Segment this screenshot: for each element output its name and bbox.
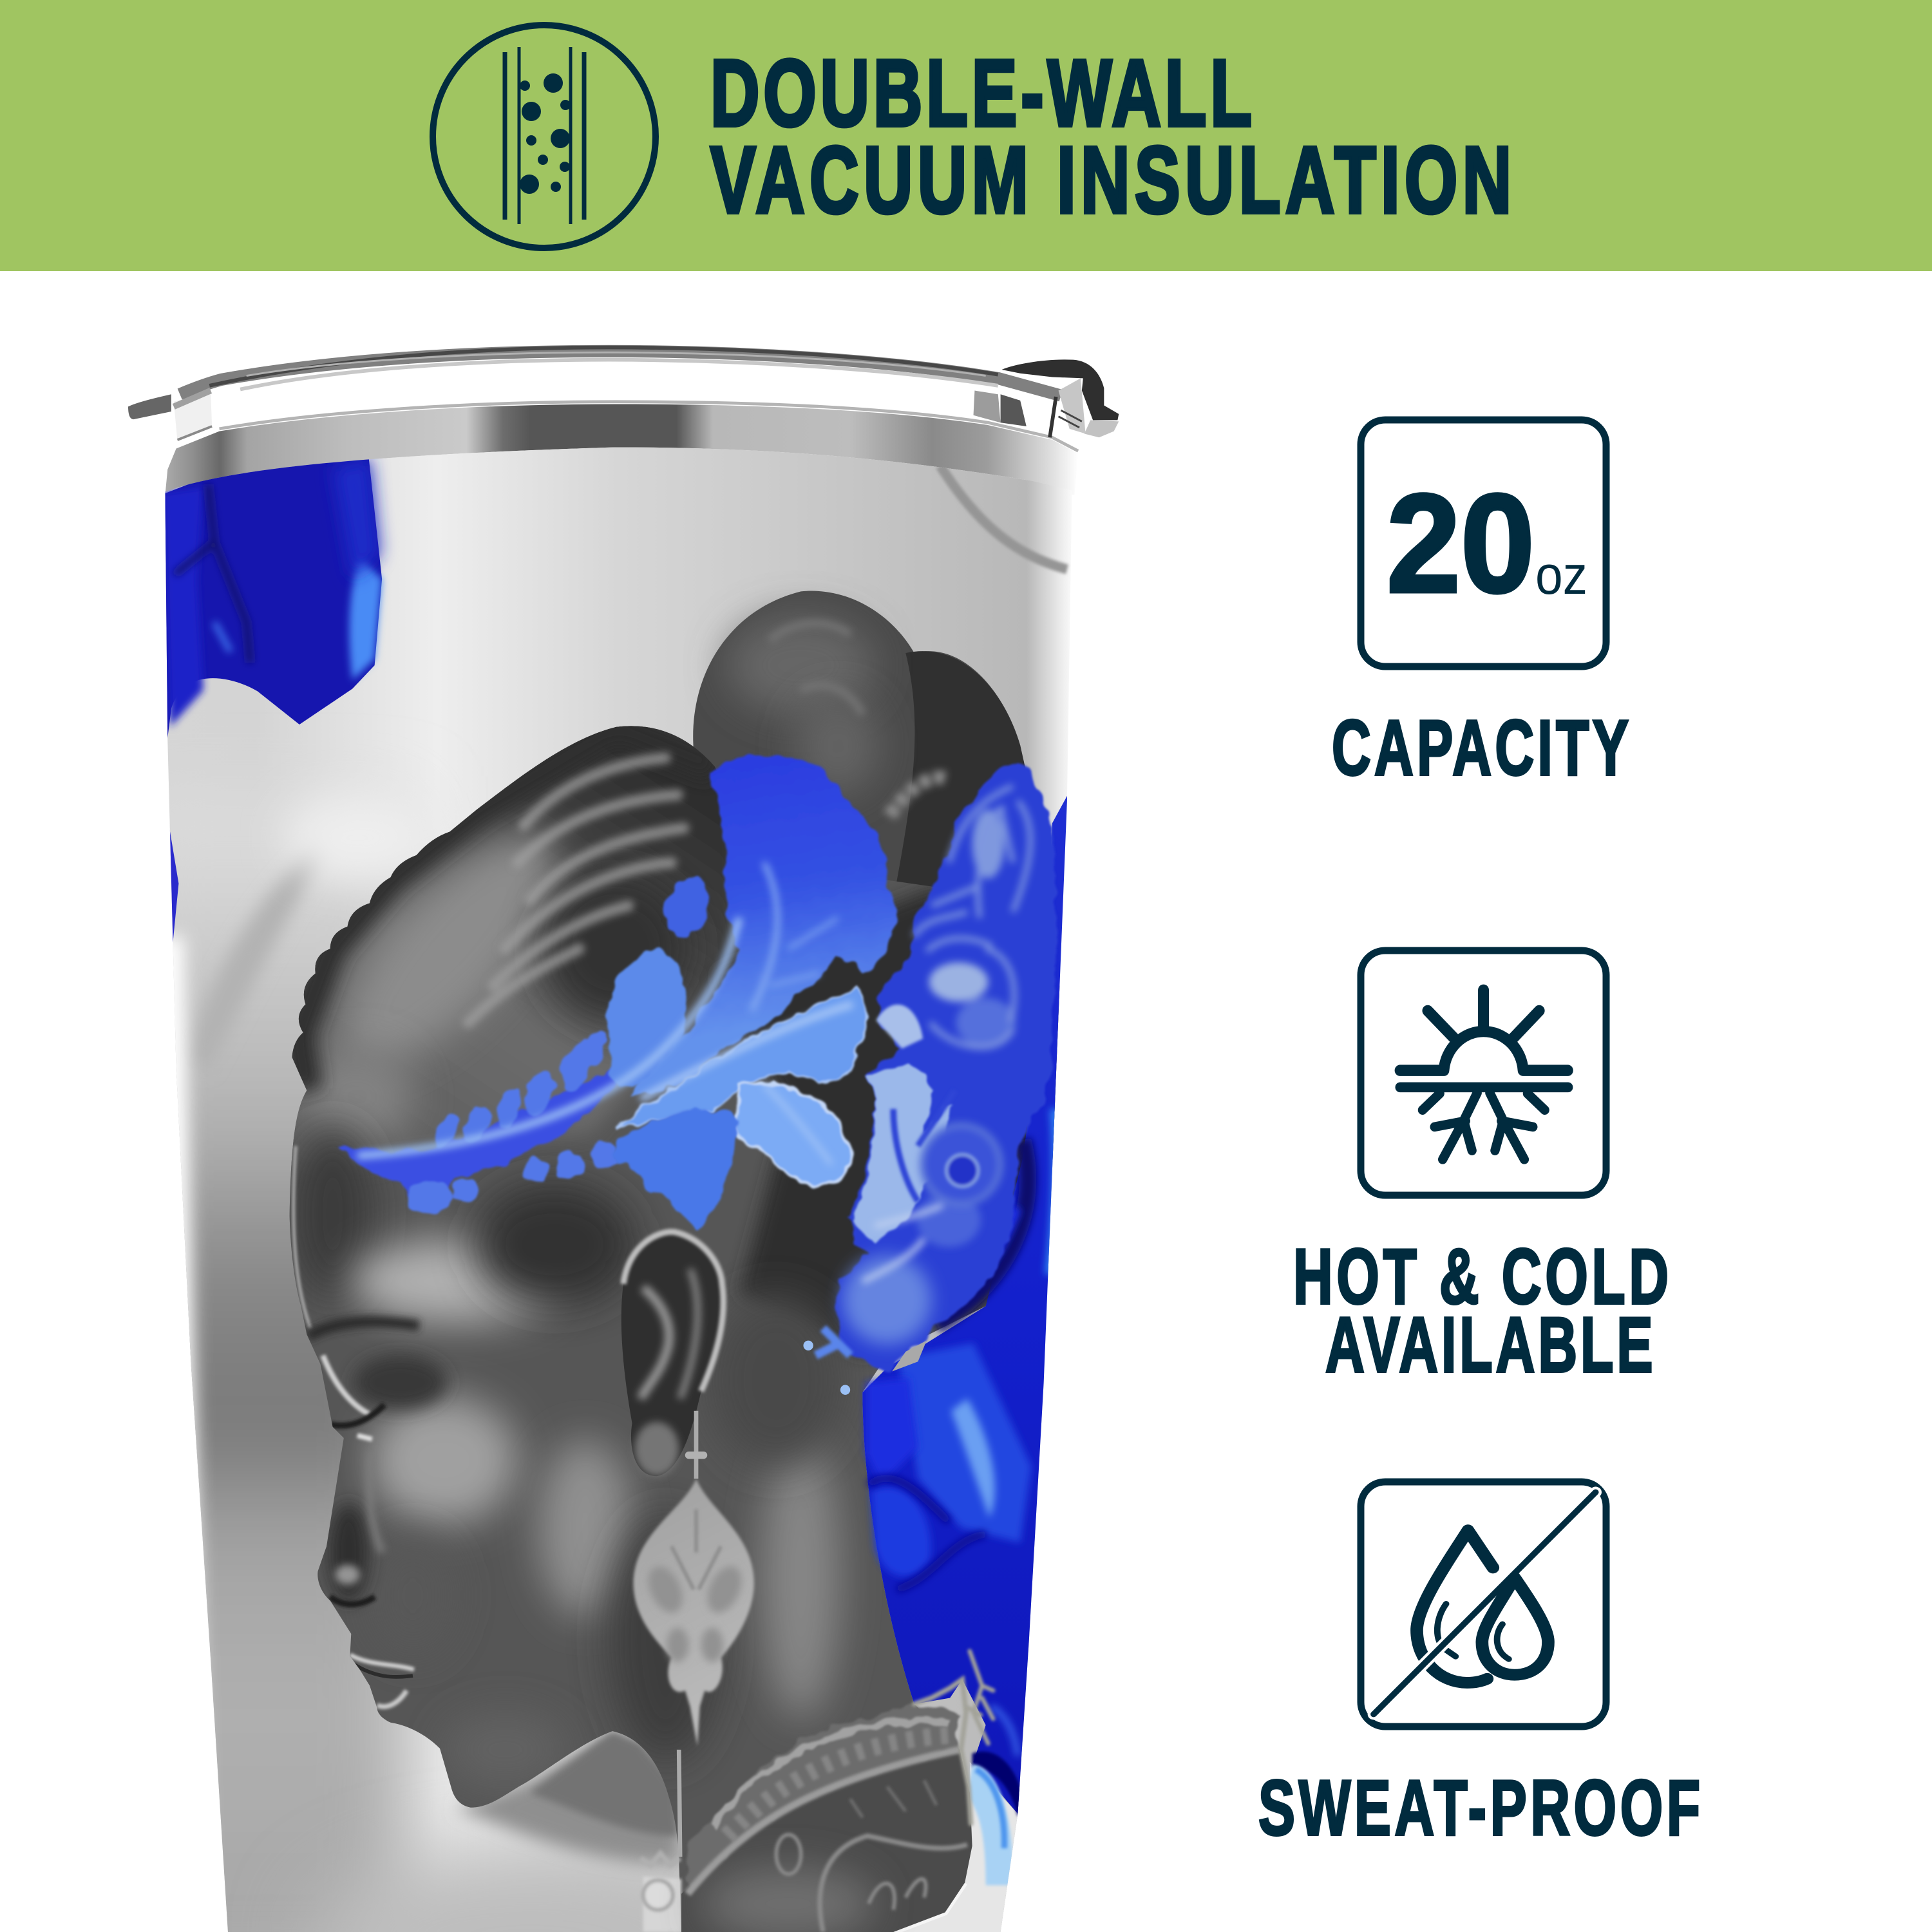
heading: DOUBLE-WALL	[710, 41, 1252, 146]
icon: crossed-out water drops box	[1361, 1482, 1606, 1727]
head and neck	[283, 703, 1059, 1932]
feature: hot and cold	[1293, 951, 1669, 1389]
feature: capacity	[1332, 420, 1629, 792]
blue panel top left	[160, 455, 382, 738]
banner background	[0, 0, 1932, 271]
forehead rim light	[294, 1146, 310, 1329]
small upper leaflets	[665, 878, 710, 936]
label: hot and cold available: HOT & COLD	[1293, 1233, 1669, 1321]
label: hot and cold available	[1293, 1233, 1669, 1389]
tumbler photo illustration	[123, 346, 1119, 1932]
central lower leaf	[616, 1109, 739, 1229]
lid rim	[180, 348, 1078, 451]
icon: 20 oz box	[1361, 420, 1606, 667]
back of head dark hair	[715, 887, 1059, 1356]
pale side petal	[876, 1005, 923, 1048]
printed tumbler body	[123, 431, 1084, 1932]
lace band	[688, 1704, 960, 1894]
coral ornament	[914, 1651, 993, 1824]
lace collar and dress	[681, 1651, 993, 1932]
leaf earring	[633, 1411, 754, 1746]
right lid tab	[974, 359, 1119, 437]
facial features	[308, 1322, 419, 1337]
label: capacity: CAPACITY	[1332, 705, 1629, 792]
feather lobes	[340, 1027, 641, 1214]
header banner	[0, 0, 1932, 271]
label: sweat-proof: SWEAT-PROOF	[1258, 1765, 1700, 1852]
lower pale rose	[803, 1062, 1001, 1395]
dress	[681, 1750, 972, 1932]
tumbler lid	[128, 346, 1119, 451]
head shading	[283, 703, 1059, 1786]
feature: sweat-proof	[1258, 1482, 1700, 1852]
heading: VACUUM INSULATION	[710, 128, 1511, 233]
heading	[710, 41, 1511, 233]
upper rose petals	[914, 786, 1030, 936]
ear	[621, 1232, 723, 1476]
middle rose petals	[927, 938, 1016, 1047]
dress embroidery	[776, 1781, 967, 1932]
soft background shading	[123, 466, 1067, 1932]
icon: 20 oz box: oz	[1535, 545, 1587, 605]
silver body gradient	[148, 431, 1084, 1932]
left lid tab	[128, 391, 212, 441]
icon: sun over snowflake box	[1361, 951, 1606, 1195]
blue rosette flowers at back of head	[803, 762, 1057, 1395]
blue sliver left edge	[170, 830, 179, 943]
icon: 20 oz box: 20	[1387, 466, 1535, 622]
steel band below lid	[165, 404, 1078, 495]
forehead and cheek highlights	[291, 1128, 375, 1300]
icon: double wall with vacuum dots	[433, 25, 656, 248]
hair buns	[693, 591, 1025, 887]
feather stem and veins	[357, 862, 853, 1164]
right lower leaf	[616, 986, 867, 1128]
label: hot and cold available: AVAILABLE	[1325, 1302, 1653, 1389]
deep blue background flower	[862, 796, 1084, 1814]
main top leaf	[629, 755, 896, 1097]
blue feather ornament in hair	[340, 755, 896, 1229]
necklace line and pendant	[641, 1750, 681, 1932]
lowest leaf	[735, 1083, 850, 1184]
hair	[283, 703, 739, 1171]
white and blue wave near collar	[862, 1707, 1025, 1932]
clear lid interior	[174, 346, 1078, 451]
rosette silhouette	[837, 762, 1057, 1372]
